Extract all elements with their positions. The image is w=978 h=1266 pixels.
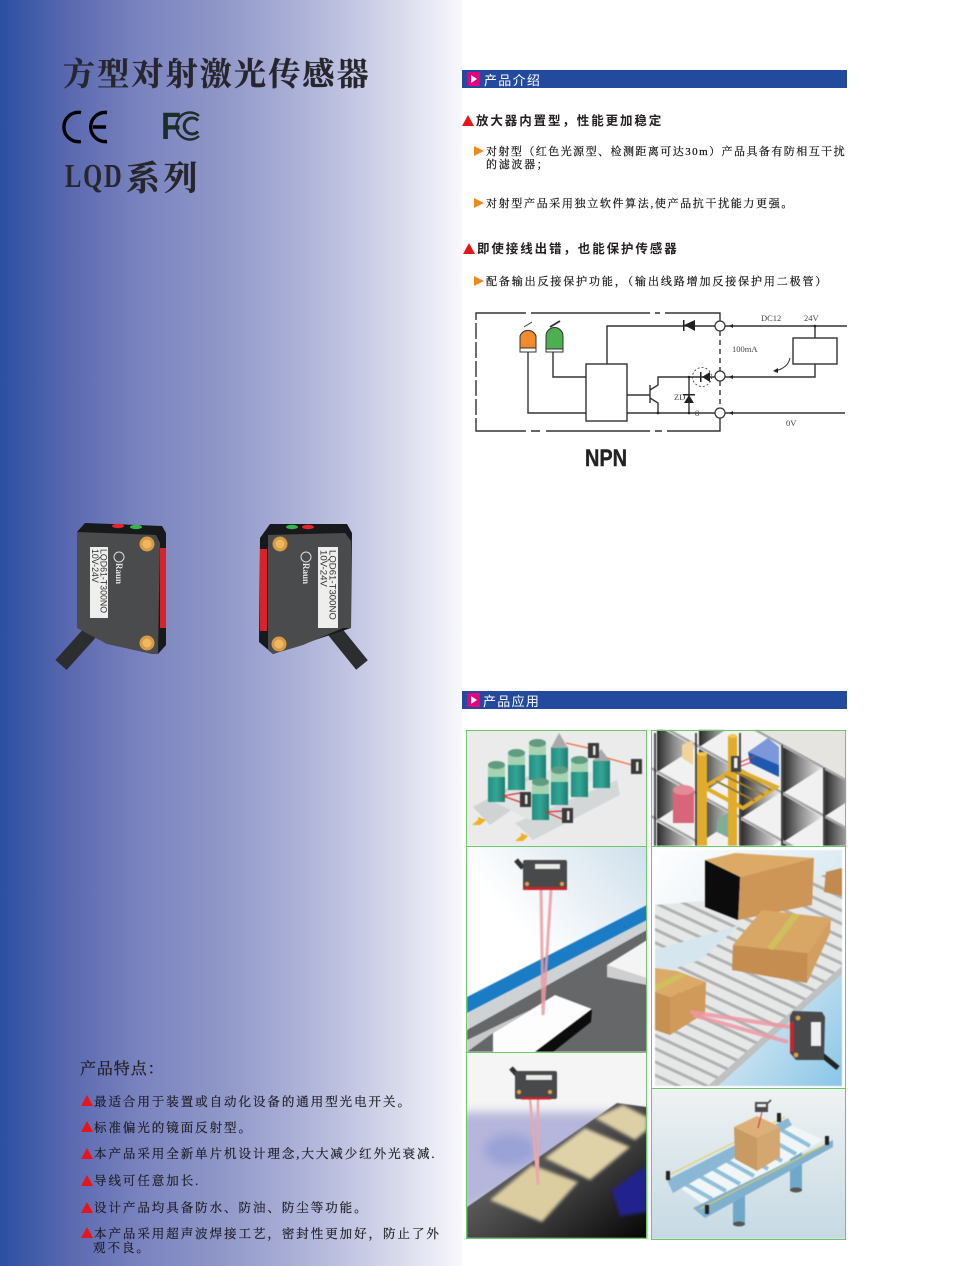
circuit labels <box>674 313 820 428</box>
series heading: LQD <box>65 158 123 195</box>
section bar: product introduction <box>462 70 847 88</box>
feature item 6: 本产品采用超声波焊接工艺，密封性更加好，防止了外 <box>94 1227 441 1241</box>
bullet: reverse connection protection: 配备输出反接保护功能，（输出线路增加反接保护用二极管） <box>486 276 828 288</box>
icon: CE and FC certification marks <box>62 106 200 148</box>
NPN label: NPN <box>585 445 627 472</box>
product photo: left sensor: LQD61-T300NO <box>98 549 108 613</box>
circuit labels: DC12 <box>761 313 781 323</box>
bullet: through-beam type filter: 的滤波器； <box>486 159 550 171</box>
heading: wiring error protection: 即使接线出错，也能保护传感器 <box>477 242 679 256</box>
feature item 2: 标准偏光的镜面反射型。 <box>94 1121 253 1135</box>
product photo: left sensor: 10V-24V <box>90 549 100 583</box>
frame: warehouse panel <box>651 730 846 847</box>
circuit labels: ZD <box>674 392 685 402</box>
bullet: through-beam type filter: 对射型（红色光源型、检测距离可达30m）产品具备有防相互干扰 <box>486 146 846 158</box>
LED indicators <box>520 321 563 352</box>
circuit diagram: NPN wiring <box>475 312 847 472</box>
sensor body <box>77 532 160 654</box>
bullet: through-beam type filter <box>474 146 846 171</box>
photo: sensor over white box on belt <box>466 845 648 1052</box>
section bar: product applications <box>462 691 847 709</box>
feature item 6 <box>81 1227 441 1255</box>
section bar: product applications: 产品应用 <box>483 694 540 709</box>
cable <box>332 628 362 665</box>
circuit labels: 24V <box>804 313 820 323</box>
cable <box>61 625 97 665</box>
circuit labels: 0V <box>786 418 797 428</box>
photo: cardboard boxes on conveyor <box>651 845 846 1087</box>
photo: warehouse shelf with lift <box>650 729 846 846</box>
frame: battery panel <box>466 730 647 847</box>
product photo: left sensor <box>56 523 166 670</box>
title: 方型对射激光传感器 <box>63 56 371 92</box>
photo: sensor over bags on dark belt <box>466 1051 648 1239</box>
circuit labels: 8 <box>695 408 699 418</box>
product photo: right sensor: Raun <box>301 563 311 584</box>
product photo: right sensor <box>259 524 368 670</box>
feature item 5: 设计产品均具备防水、防油、防尘等功能。 <box>94 1201 369 1215</box>
features heading: 产品特点： <box>80 1061 165 1078</box>
series heading <box>65 151 201 200</box>
feature item 4: 导线可任意加长. <box>94 1174 200 1188</box>
sensor body <box>268 533 351 654</box>
frame: cardboard box panel <box>651 846 846 1089</box>
photo: battery cells on rails <box>467 731 646 846</box>
icon: CE and FC certification marks: F <box>161 106 181 148</box>
bullet: independent software algorithm: 对射型产品采用独立软件算法,使产品抗干扰能力更强。 <box>486 198 794 210</box>
feature item 6: 观不良。 <box>93 1241 151 1255</box>
section bar: product introduction: 产品介绍 <box>484 73 541 88</box>
feature item 1: 最适合用于装置或自动化设备的通用型光电开关。 <box>94 1095 412 1109</box>
text block: product features <box>80 1060 441 1255</box>
frame: bags panel <box>466 1052 647 1239</box>
gradient background panel <box>0 0 462 1266</box>
product photo: right sensor: 10V-24V <box>318 550 328 587</box>
circuit labels: 100mA <box>732 344 758 354</box>
heading: built-in amplifier: 放大器内置型，性能更加稳定 <box>476 114 663 128</box>
frame: white box panel <box>466 846 647 1053</box>
product photo: left sensor: Raun <box>114 563 124 584</box>
series heading: 系列 <box>126 151 201 200</box>
feature item 3: 本产品采用全新单片机设计理念,大大减少红外光衰减. <box>94 1147 437 1161</box>
photo: box on roller conveyor <box>650 1087 846 1239</box>
frame: roller conveyor panel <box>651 1088 846 1240</box>
product photo: right sensor: LQD61-T300NO <box>326 550 338 620</box>
